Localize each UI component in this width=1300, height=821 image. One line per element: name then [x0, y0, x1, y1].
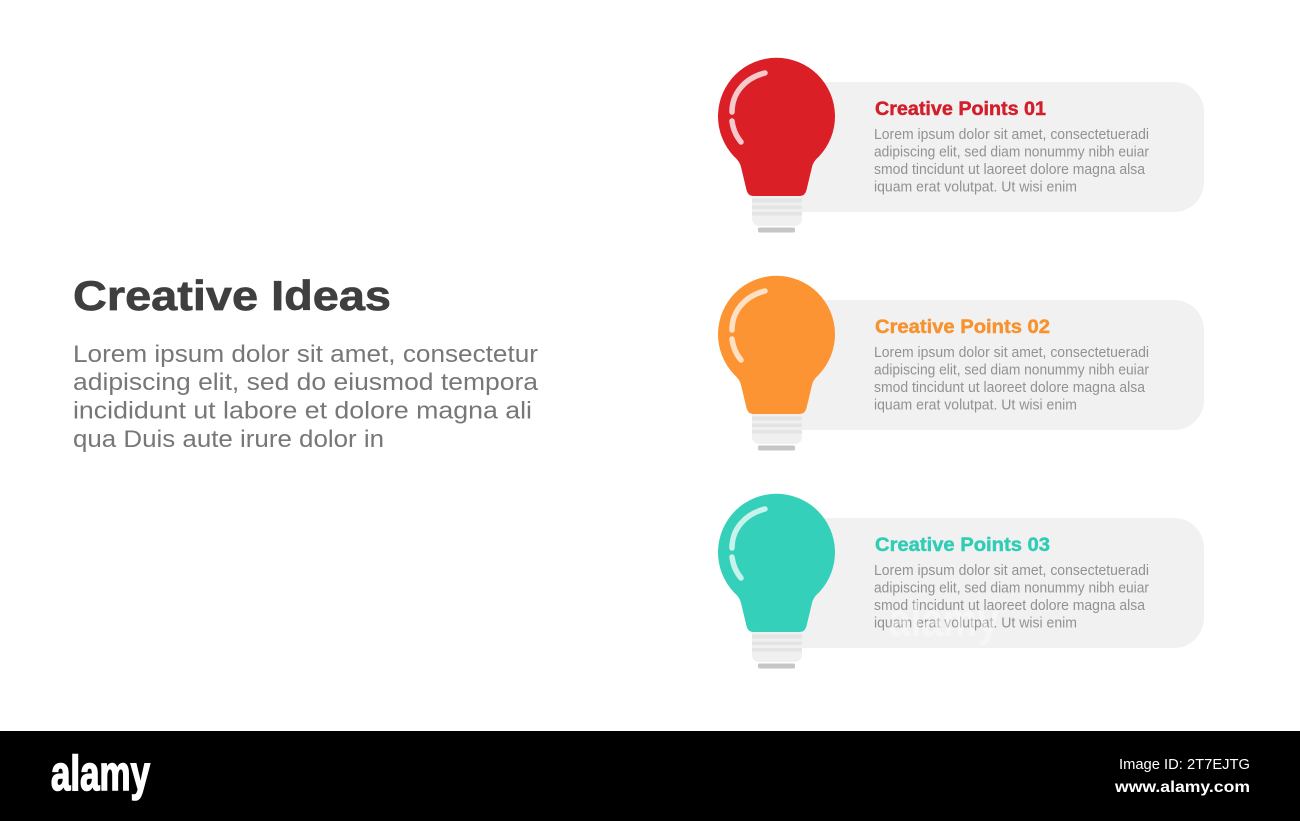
card body text: adipiscing elit, sed diam nonummy nibh euiar	[874, 362, 1149, 378]
card body text	[874, 345, 1149, 414]
image id: Image ID: 2T7EJTG	[1119, 757, 1250, 773]
icon: red light bulb	[718, 58, 835, 233]
intro paragraph: adipiscing elit, sed do eiusmod tempora	[73, 369, 538, 396]
card body text: smod tincidunt ut laoreet dolore magna alsa	[874, 380, 1146, 396]
card body text: iquam erat volutpat. Ut wisi enim	[874, 616, 1077, 632]
intro paragraph: incididunt ut labore et dolore magna ali	[73, 398, 532, 424]
heading and intro text	[73, 272, 538, 453]
faint watermark: alamy	[889, 594, 999, 646]
card body text: iquam erat volutpat. Ut wisi enim	[874, 180, 1077, 196]
card heading: Creative Points 01	[875, 99, 1046, 120]
card background	[770, 300, 1204, 430]
panel: creative point 01	[718, 58, 1204, 233]
card body text: iquam erat volutpat. Ut wisi enim	[874, 398, 1077, 414]
footer bar	[0, 731, 1300, 821]
panel: creative point 02	[718, 276, 1204, 450]
card body text: adipiscing elit, sed diam nonummy nibh euiar	[874, 144, 1149, 160]
icon: teal light bulb	[718, 494, 835, 668]
website address: www.alamy.com	[1114, 779, 1250, 796]
card background	[770, 82, 1204, 212]
card body text: adipiscing elit, sed diam nonummy nibh euiar	[874, 580, 1149, 596]
card body text	[874, 563, 1149, 632]
card body text	[874, 127, 1149, 196]
card heading: Creative Points 02	[875, 317, 1050, 338]
card background	[770, 518, 1204, 648]
intro paragraph: qua Duis aute irure dolor in	[73, 426, 384, 453]
card heading: Creative Points 03	[875, 535, 1050, 556]
icon: orange light bulb	[718, 276, 835, 450]
card body text: smod tincidunt ut laoreet dolore magna alsa	[874, 598, 1146, 614]
intro paragraph: Lorem ipsum dolor sit amet, consectetur	[73, 341, 538, 368]
card body text: Lorem ipsum dolor sit amet, consectetueradi	[874, 127, 1149, 143]
card body text: Lorem ipsum dolor sit amet, consectetueradi	[874, 563, 1149, 579]
panel: creative point 03	[718, 494, 1204, 668]
card body text: smod tincidunt ut laoreet dolore magna alsa	[874, 162, 1146, 178]
footer logo: alamy	[51, 747, 150, 801]
intro paragraph	[73, 341, 538, 453]
title: Creative Ideas	[73, 272, 391, 319]
card body text: Lorem ipsum dolor sit amet, consectetueradi	[874, 345, 1149, 361]
